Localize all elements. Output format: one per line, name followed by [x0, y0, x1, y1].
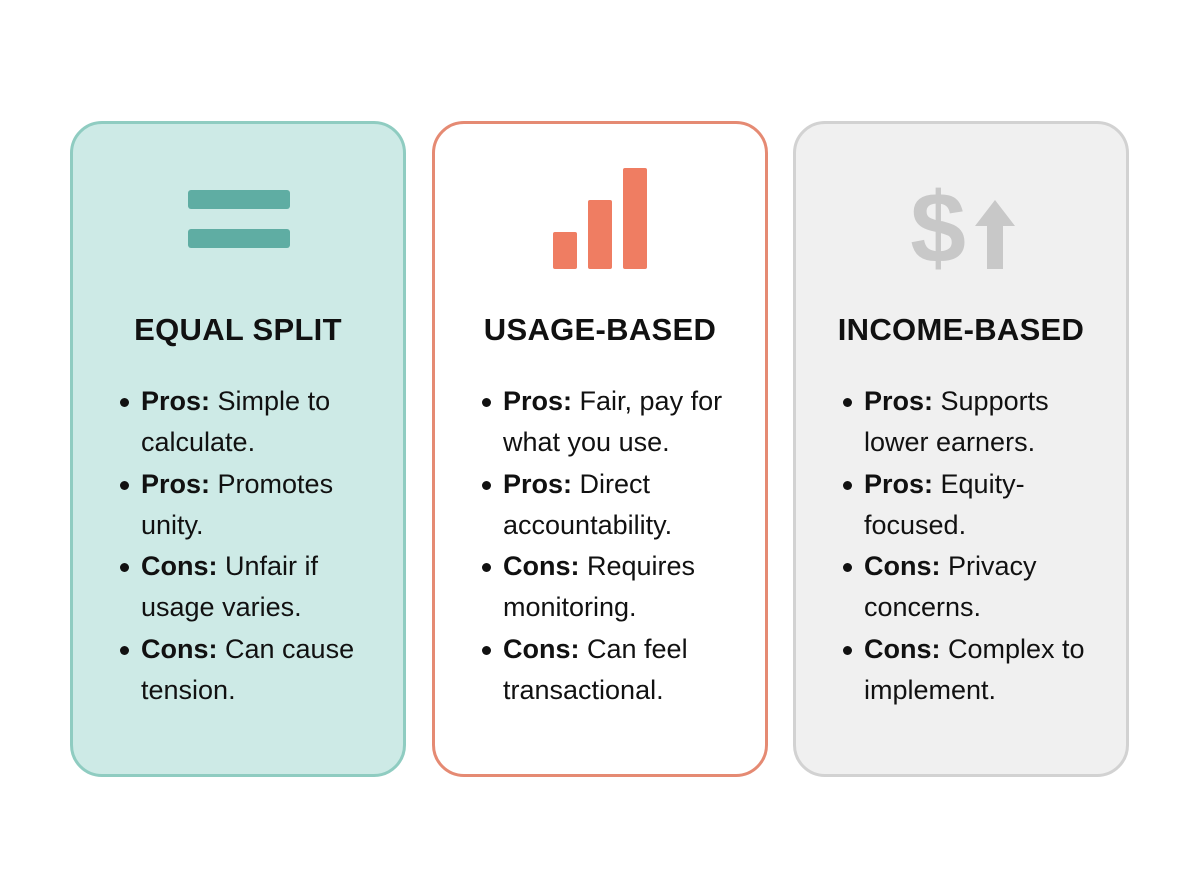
panel: income-based — [793, 121, 1129, 777]
text block: income-based pros/cons: implement. — [864, 675, 996, 705]
icon: equals sign — [188, 190, 290, 248]
text block: usage-based pros/cons: monitoring. — [503, 592, 637, 622]
heading: equal split: EQUAL SPLIT — [134, 312, 342, 347]
text block: income-based pros/cons: Cons: Complex to — [864, 634, 1085, 664]
panel: usage-based — [432, 121, 768, 777]
text block: usage-based pros/cons: Pros: Fair, pay for — [503, 386, 722, 416]
text block: usage-based pros/cons: accountability. — [503, 510, 672, 540]
text block: equal split pros/cons: Pros: Simple to — [141, 386, 330, 416]
text block: equal split pros/cons: calculate. — [141, 427, 255, 457]
text block: usage-based pros/cons: Cons: Can feel — [503, 634, 688, 664]
text block: income-based pros/cons: Cons: Privacy — [864, 551, 1037, 581]
text block: income-based pros/cons — [843, 386, 1085, 705]
text block: income-based pros/cons: focused. — [864, 510, 966, 540]
icon: dollar with up arrow — [910, 172, 1015, 284]
heading: usage-based: USAGE-BASED — [484, 312, 716, 347]
panel: equal split — [70, 121, 406, 777]
text block: usage-based pros/cons: what you use. — [503, 427, 670, 457]
text block: usage-based pros/cons: Pros: Direct — [503, 469, 650, 499]
text block: equal split pros/cons: Cons: Unfair if — [141, 551, 318, 581]
text block: equal split pros/cons: tension. — [141, 675, 236, 705]
text block: equal split pros/cons: unity. — [141, 510, 204, 540]
text block: equal split pros/cons: usage varies. — [141, 592, 302, 622]
icon: dollar with up arrow: $ — [910, 172, 966, 284]
icon: bar chart — [553, 168, 647, 269]
text block: usage-based pros/cons: transactional. — [503, 675, 664, 705]
text block: usage-based pros/cons — [482, 386, 722, 705]
text block: income-based pros/cons: Pros: Equity- — [864, 469, 1025, 499]
text block: usage-based pros/cons: Cons: Requires — [503, 551, 695, 581]
text block: income-based pros/cons: concerns. — [864, 592, 981, 622]
text block: income-based pros/cons: Pros: Supports — [864, 386, 1049, 416]
text block: equal split pros/cons — [120, 386, 354, 705]
text block: income-based pros/cons: lower earners. — [864, 427, 1035, 457]
text block: equal split pros/cons: Pros: Promotes — [141, 469, 333, 499]
text block: equal split pros/cons: Cons: Can cause — [141, 634, 354, 664]
heading: income-based: INCOME-BASED — [838, 312, 1084, 347]
